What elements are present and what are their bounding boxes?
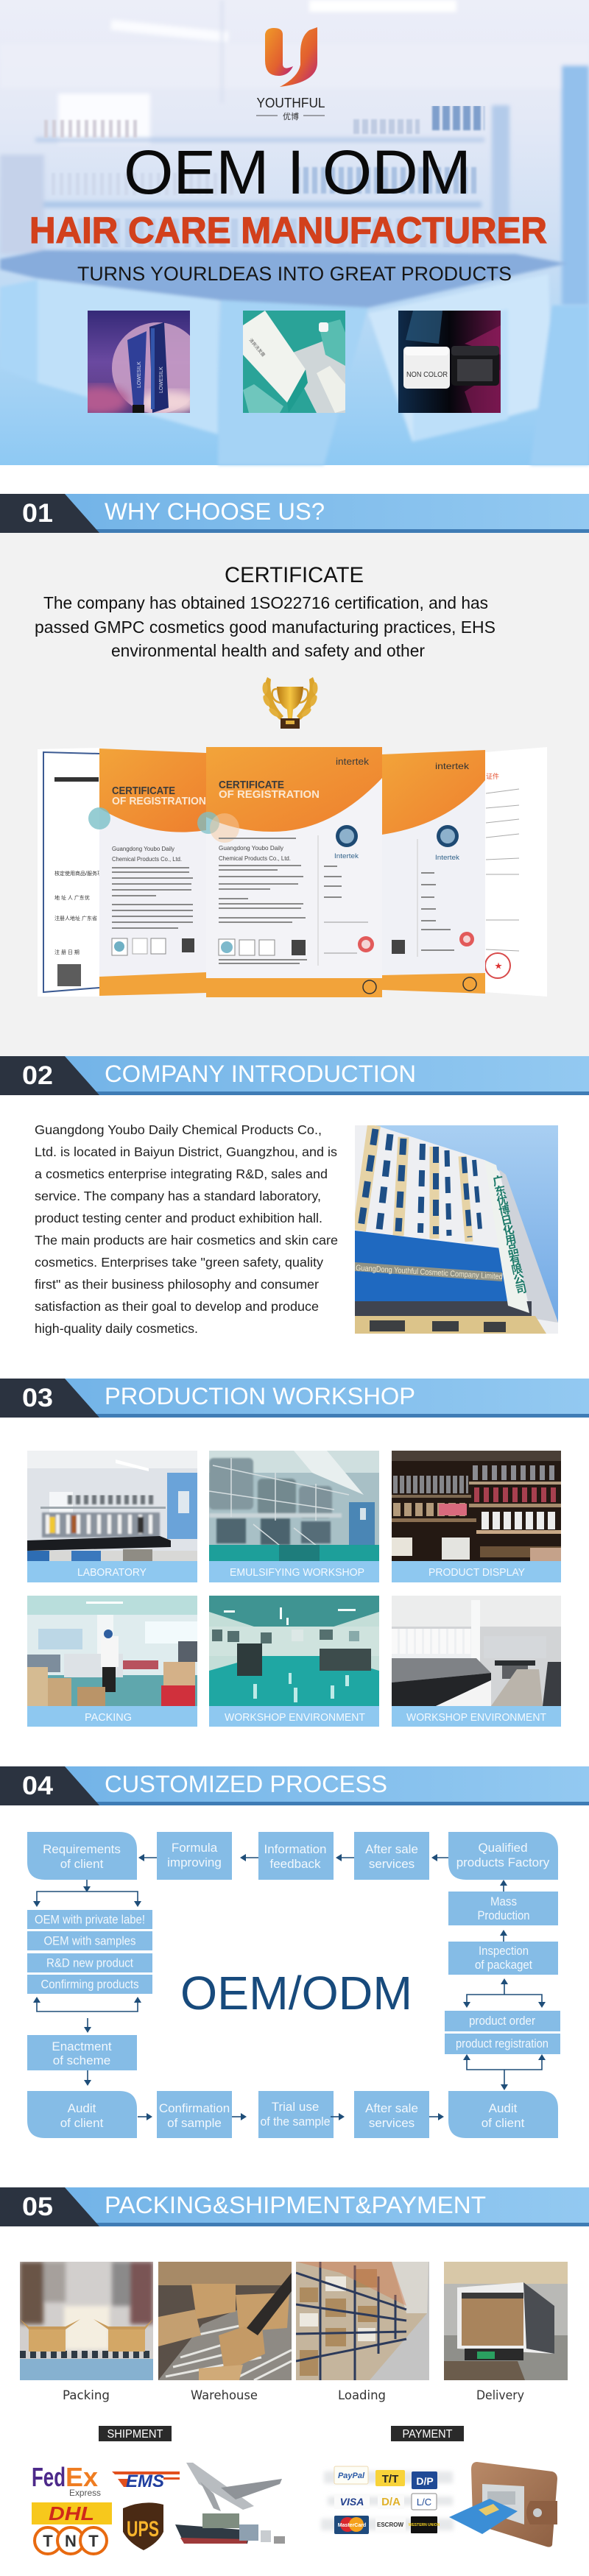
step: audit of client right [448,2091,558,2138]
logo wordmark: YOUTHFUL [256,95,325,110]
product image: non color jars [398,311,501,413]
arrow [500,1880,507,1892]
section header 01 [0,494,589,533]
step: trial use of the sample [258,2091,334,2138]
payment: Escrow: ESCROW [377,2522,403,2528]
payment: L/C: L/C [417,2497,431,2508]
certificate: left orange: CERTIFICATE [112,785,175,797]
certificate: left orange: Guangdong Youbo Daily [112,846,174,852]
step: enactment of scheme: Enactment [52,2039,112,2053]
certificate: center orange: Intertek [334,852,359,860]
payment: D/P: D/P [416,2475,434,2487]
arrow [336,1854,354,1861]
step: after sale services bottom [354,2091,429,2138]
photo: delivery truck [444,2262,568,2380]
section header 05 [0,2187,589,2226]
step: after sale services: After sale [365,1842,418,1856]
logo: FedEx: Fed [32,2462,66,2492]
caption [209,1561,379,1582]
logo: TNT: T [43,2532,53,2550]
photo: white laboratory [392,1596,561,1706]
photo: warehouse conveyor [158,2262,292,2380]
step: formula improving: improving [167,1855,222,1869]
logo: TNT: N [65,2532,77,2550]
icon: cargo ship and trucks [175,2513,285,2544]
step: audit of client left: Audit [68,2101,96,2115]
logo chinese name: 优博 [283,112,299,121]
photo: company building [355,1125,558,1334]
text block: company introduction: first" as their business philosophy and consumer [35,1277,319,1292]
panel: workshop environment photo 1 [209,1596,379,1727]
certificate: center orange: Chemical Products Co., Ltd. [219,854,291,862]
payment: VISA [334,2494,370,2509]
heading: OEM/ODM: OEM/ODM [180,1967,412,2020]
step: after sale services bottom: services [369,2116,415,2130]
photo: emulsifying workshop [209,1451,379,1561]
payment: Western Union: WESTERN UNION [409,2523,440,2527]
step: inspection of package [448,1942,558,1975]
step: mass production: Production [477,1908,530,1922]
text block: company introduction: product testing center and product exhibition hall. [35,1211,322,1225]
arrow [331,2113,345,2120]
section header 01: 01 [22,499,53,528]
step: after sale services: services [369,1857,415,1871]
section header 02: COMPANY INTRODUCTION [105,1061,416,1087]
step: after sale services bottom: After sale [365,2101,418,2115]
payment: T/T [375,2470,405,2486]
photo: teal workshop [209,1596,379,1706]
payment: T/T: T/T [382,2473,398,2485]
arrow [232,2113,247,2120]
section header 02: 02 [22,1061,53,1090]
certificate: left white document: 注 册 日 期 [54,949,80,955]
section header 04: 04 [22,1772,54,1800]
step: qualified products factory: products Factory [456,1855,550,1869]
step: trial use of the sample: Trial use [272,2100,319,2114]
step: requirements of client [27,1832,137,1880]
step: mass production: Mass [490,1894,517,1908]
step: after sale services [354,1832,429,1880]
heading: certificate: CERTIFICATE [225,563,364,587]
step: qualified products factory: Qualified [478,1841,528,1855]
logo: EMS [112,2471,180,2491]
step: formula improving [157,1832,232,1880]
section header 01: WHY CHOOSE US? [105,498,325,525]
step: inspection of package: Inspection [479,1944,529,1958]
step: requirements of client: Requirements [43,1842,121,1856]
section header 05: 05 [22,2193,53,2221]
photo: company building: GuangDong Youthful Cosmetic Company Limited [356,1264,503,1281]
payment: Escrow [375,2517,406,2532]
section header 02 [0,1056,589,1095]
arrow [138,2113,152,2120]
icon: gold trophy [261,677,319,729]
photo: warehouse shelves [296,2262,429,2380]
icon: wallet and card [449,2462,557,2547]
panel: certificates fan [38,747,547,997]
step: product registration [445,2034,560,2054]
panel: certificate section background [0,533,589,1056]
section header 03: 03 [22,1384,53,1412]
section header 04: CUSTOMIZED PROCESS [105,1771,387,1797]
text block: company introduction: The main products are hair cosmetics and skin care [35,1233,338,1248]
payment: VISA: VISA [340,2496,364,2508]
payment: PayPal [334,2466,368,2484]
step: product registration: product registration [456,2037,549,2050]
product image: teal bottles: 清爽洗发露 [247,337,267,358]
caption [27,1561,197,1582]
text block: company introduction: service. The company has a standard laboratory, [35,1189,321,1203]
icon: airplane [186,2463,282,2511]
text block: certificate description [35,593,495,660]
certificate: right orange: Intertek [435,854,460,861]
caption text: WORKSHOP ENVIRONMENT [406,1711,546,1724]
heading: payment: PAYMENT [402,2428,453,2441]
hero laboratory backdrop [0,0,589,465]
text block: company introduction: Guangdong Youbo Daily Chemical Products Co., [35,1122,322,1137]
caption [392,1561,561,1582]
panel: hero [0,0,589,465]
panel: shipment logos [32,2462,285,2554]
title: OEM I ODM: OEM I ODM [124,138,471,207]
section header 03: PRODUCTION WORKSHOP [105,1383,415,1409]
certificate: right white document: 证件 [486,772,499,780]
logo: FedEx [32,2462,101,2498]
payment: Western Union [409,2516,440,2533]
certificate: center orange: OF REGISTRATION [219,788,320,801]
heading: shipment: SHIPMENT [107,2428,163,2441]
arrow [138,1854,157,1861]
certificate: left orange [88,749,206,996]
arrow: merge from OEM options [33,1997,141,2033]
text block: company introduction: cosmetics. Enterprises take "green safety, quality [35,1255,323,1270]
certificate: left white document: 注册人地址 广东省 [54,915,97,921]
product image: hair colour tube [88,311,190,413]
step: confirmation of sample: of sample [167,2116,222,2130]
caption text: WORKSHOP ENVIRONMENT [225,1711,365,1724]
product image: teal bottles [243,311,345,413]
step: enactment of scheme: of scheme [53,2053,110,2067]
text block: company introduction: high-quality daily cosmetics. [35,1321,198,1336]
step: OEM with private label: OEM with private labe! [35,1912,145,1927]
logo: DHL: DHL [49,2502,94,2524]
label: Loading [338,2388,386,2403]
product image: non color jars: NON COLOR [406,371,448,379]
payment: D/A [378,2494,404,2509]
section header 03 [0,1379,589,1418]
panel: emulsifying workshop photo [209,1451,379,1582]
logo: UPS [123,2502,163,2550]
heading: payment [391,2426,464,2441]
step: R&D new product [27,1953,152,1972]
product image: hair colour tube: LOWESILK [137,361,142,388]
step: mass production [448,1892,558,1925]
logo: TNT: T [88,2532,99,2550]
arrow [429,2113,444,2120]
chart: customized process flow [27,1832,560,2138]
step: enactment of scheme [27,2035,137,2070]
section header 04 [0,1766,589,1805]
photo: packing [27,1596,197,1706]
certificate: left orange: OF REGISTRATION [112,796,206,807]
caption text: EMULSIFYING WORKSHOP [230,1566,364,1579]
certificate: left orange: Chemical Products Co., Ltd. [112,856,182,863]
arrow [500,1930,507,1942]
logo [256,27,325,121]
caption [27,1706,197,1727]
arrow [431,1854,448,1861]
certificate: left white document: 地 址 人 广东优 [54,894,90,901]
panel: product display photo [392,1451,561,1582]
payment: D/A: D/A [381,2496,401,2508]
logo: TNT [35,2527,107,2554]
photo: product display [392,1451,561,1561]
label: Delivery [476,2388,524,2403]
label: Warehouse [191,2388,258,2403]
payment: L/C [412,2494,437,2510]
arrow [84,2070,91,2086]
payment: D/P [412,2471,437,2489]
panel: payment methods [321,2462,557,2547]
text block: certificate description: environmental health and safety and other [111,641,425,660]
step: inspection of package: of packaget [475,1958,532,1972]
text block: company introduction [35,1122,338,1336]
certificate: right orange: intertek [435,761,470,771]
panel: laboratory photo [27,1451,197,1582]
certificate: left white document [38,748,107,997]
step: information feedback [258,1832,334,1880]
panel: workshop environment photo 2 [392,1596,561,1727]
arrow [240,1854,258,1861]
step: confirmation of sample [157,2091,232,2138]
text block: company introduction: Ltd. is located in Baiyun District, Guangzhou, and is [35,1144,337,1159]
step: qualified products factory [448,1832,558,1880]
certificate: center orange: Guangdong Youbo Daily [219,844,284,852]
logo: EMS: EMS [126,2471,164,2491]
caption text: PRODUCT DISPLAY [428,1566,525,1579]
payment: MasterCard: MasterCard [338,2523,366,2528]
step: R&D new product: R&D new product [46,1956,133,1970]
tagline: TURNS YOURLDEAS INTO GREAT PRODUCTS [77,263,512,285]
certificate: right white document [485,747,547,997]
text block: company introduction: a cosmetics enterprise integrating R&D, sales and [35,1167,328,1181]
step: OEM with samples [27,1931,152,1950]
certificate: right orange [382,750,485,994]
logo: DHL [32,2502,112,2524]
step: formula improving: Formula [172,1841,218,1855]
step: confirming products [27,1975,152,1994]
photo: laboratory [27,1451,197,1561]
caption text: PACKING [85,1711,132,1724]
certificate: center orange: intertek [336,756,370,767]
photo: company building: 广东优博日化用品有限公司 [490,1173,528,1295]
arrow: branch to OEM options [33,1880,141,1907]
payment: PayPal: PayPal [338,2471,365,2480]
certificate: center orange: CERTIFICATE [219,779,284,791]
caption [209,1706,379,1727]
photo: packing boxes [20,2262,153,2380]
step: product order: product order [469,2014,535,2028]
label: Packing [63,2388,110,2403]
section header 05: PACKING&SHIPMENT&PAYMENT [105,2192,486,2218]
step: trial use of the sample: of the sample [261,2115,330,2129]
step: product order [445,2011,560,2031]
step: audit of client right: of client [482,2116,525,2130]
logo: FedEx: Express [69,2488,101,2498]
step: OEM with private label [27,1910,152,1929]
payment: MasterCard [334,2516,369,2534]
step: OEM with samples: OEM with samples [44,1934,135,1947]
text block: company introduction: satisfaction as their goal to develop and produce [35,1299,319,1314]
step: confirming products: Confirming products [41,1977,138,1992]
step: audit of client left: of client [60,2116,104,2130]
step: audit of client left [27,2091,137,2138]
step: audit of client right: Audit [489,2101,518,2115]
step: information feedback: feedback [269,1857,321,1871]
heading: shipment [99,2426,172,2441]
logo: FedEx: Ex [66,2462,98,2492]
text block: certificate description: The company has obtained 1SO22716 certification, and has [43,593,488,612]
certificate: right white document: ★ [495,963,502,971]
product image: hair colour tube: LOWESILK [159,367,164,393]
logo: UPS: UPS [127,2517,159,2541]
step: information feedback: Information [264,1842,327,1856]
step: requirements of client: of client [60,1857,104,1871]
arrow: product steps to inspection [463,1978,546,2008]
text block: certificate description: passed GMPC cosmetics good manufacturing practices, EHS [35,618,495,637]
panel: packing photo [27,1596,197,1727]
certificate: center orange [197,747,382,997]
caption [392,1706,561,1727]
caption text: LABORATORY [77,1566,147,1579]
payment rows backdrop [321,2471,454,2530]
icon: U logo mark [265,27,317,87]
step: confirmation of sample: Confirmation [159,2101,230,2115]
subtitle: hair care manufacturer: HAIR CARE MANUFACTURER [29,210,547,251]
certificate: left white document: 核定使用商品/服务项目 [54,870,107,877]
arrow: audit up to registration [463,2054,546,2090]
